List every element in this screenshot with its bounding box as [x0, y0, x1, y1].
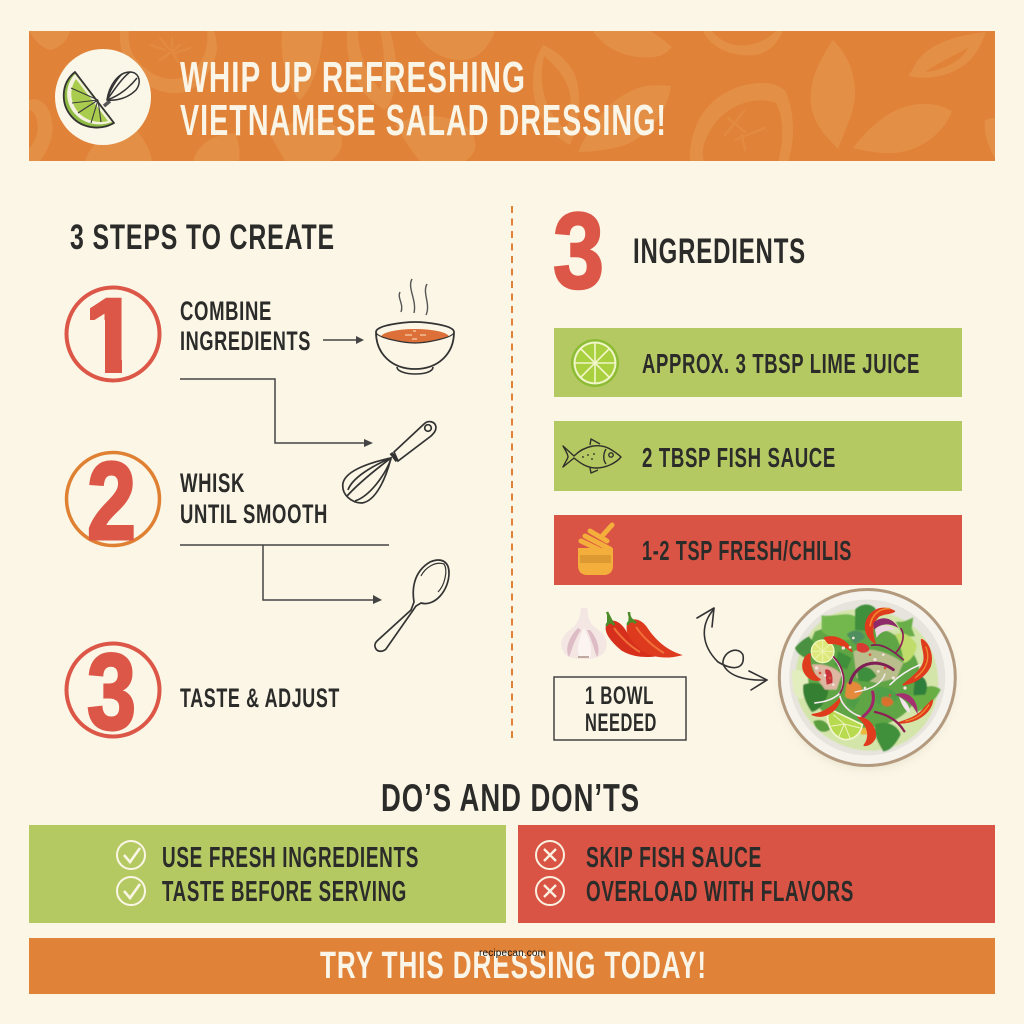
callout: 1 bowl needed: NEEDED: [585, 709, 657, 737]
callout: 1 bowl needed: [554, 677, 686, 740]
connector arrow 2 to spoon: [180, 545, 389, 604]
panel: don'ts: SKIP FISH SAUCE: [586, 842, 762, 874]
ingredient bar: chilis: [554, 515, 962, 585]
call to action banner: [29, 938, 995, 994]
icon: cross 2: [536, 877, 564, 905]
title: [180, 53, 667, 145]
panel: do's and don'ts: [29, 777, 995, 923]
curly arrow: [697, 608, 767, 690]
ingredient bar: lime juice: [554, 328, 962, 397]
icon: fish: [563, 439, 621, 473]
whisk: [104, 72, 139, 106]
ingredient bar: fish sauce: 2 TBSP FISH SAUCE: [642, 442, 836, 473]
panel: don'ts: OVERLOAD WITH FLAVORS: [586, 876, 854, 908]
ingredient bar: fish sauce: [554, 421, 962, 491]
illustration: salad plate: [779, 590, 955, 769]
step 2 text: UNTIL SMOOTH: [180, 499, 328, 529]
chili strips: [803, 608, 932, 745]
icon: soup bowl: [376, 279, 454, 374]
header background pattern: [29, 31, 995, 162]
icon: honey dipper pot: [578, 525, 613, 575]
icon: spoon: [375, 560, 449, 651]
lime wedge: [64, 72, 114, 128]
icon: check 1: [117, 841, 145, 869]
step 3 text: TASTE & ADJUST: [180, 683, 340, 713]
step 3 badge: [66, 631, 160, 752]
ingredients heading: 3: [553, 190, 604, 311]
panel: do's: TASTE BEFORE SERVING: [162, 876, 407, 908]
onion rings: [815, 618, 920, 731]
connector arrow 1 to whisk: [180, 379, 373, 447]
salad contents: [792, 605, 941, 751]
watermark: recipecan.com: [479, 948, 546, 959]
step 2 text: [180, 468, 328, 529]
icon: red chilis: [606, 612, 680, 657]
icon: whisk: [343, 422, 436, 503]
icon: cross 1: [536, 841, 564, 869]
panel: ingredients: [553, 190, 962, 769]
panel: don'ts: [518, 825, 995, 923]
panel: do's: USE FRESH INGREDIENTS: [162, 842, 419, 874]
header banner: [29, 31, 995, 162]
icon: garlic: [561, 608, 607, 659]
leaves: [792, 605, 941, 751]
logo: lime and whisk: [55, 49, 151, 145]
title: VIETNAMESE SALAD DRESSING!: [180, 96, 667, 145]
steps heading: 3 STEPS TO CREATE: [70, 218, 335, 257]
step 1 text: [180, 296, 311, 356]
ingredients heading: [553, 190, 806, 311]
step 2 badge: 2: [87, 440, 136, 563]
ingredient bar: chilis: 1-2 TSP FRESH/CHILIS: [642, 535, 852, 566]
ingredients heading: INGREDIENTS: [633, 232, 806, 271]
step 1 text: COMBINE: [180, 296, 272, 326]
step 1 text: INGREDIENTS: [180, 326, 311, 356]
callout: 1 bowl needed: 1 BOWL: [585, 682, 654, 710]
step 3 badge: 3: [87, 631, 136, 752]
section heading: DO’S AND DON’TS: [381, 777, 640, 820]
step 2 badge: [66, 440, 160, 563]
panel: 3 steps to create: [66, 218, 454, 752]
icon: check 2: [117, 877, 145, 905]
title: WHIP UP REFRESHING: [180, 53, 526, 102]
lime slices: [811, 640, 862, 740]
step 1 badge: [64, 286, 162, 382]
arrow to bowl: [323, 336, 364, 344]
step 2 text: WHISK: [180, 468, 245, 498]
panel: do's: [29, 825, 506, 923]
call to action banner: TRY THIS DRESSING TODAY!: [320, 945, 707, 987]
icon: lime slice: [571, 339, 619, 387]
step 1 badge: 1: [81, 277, 140, 395]
salad flecks: [815, 637, 907, 690]
